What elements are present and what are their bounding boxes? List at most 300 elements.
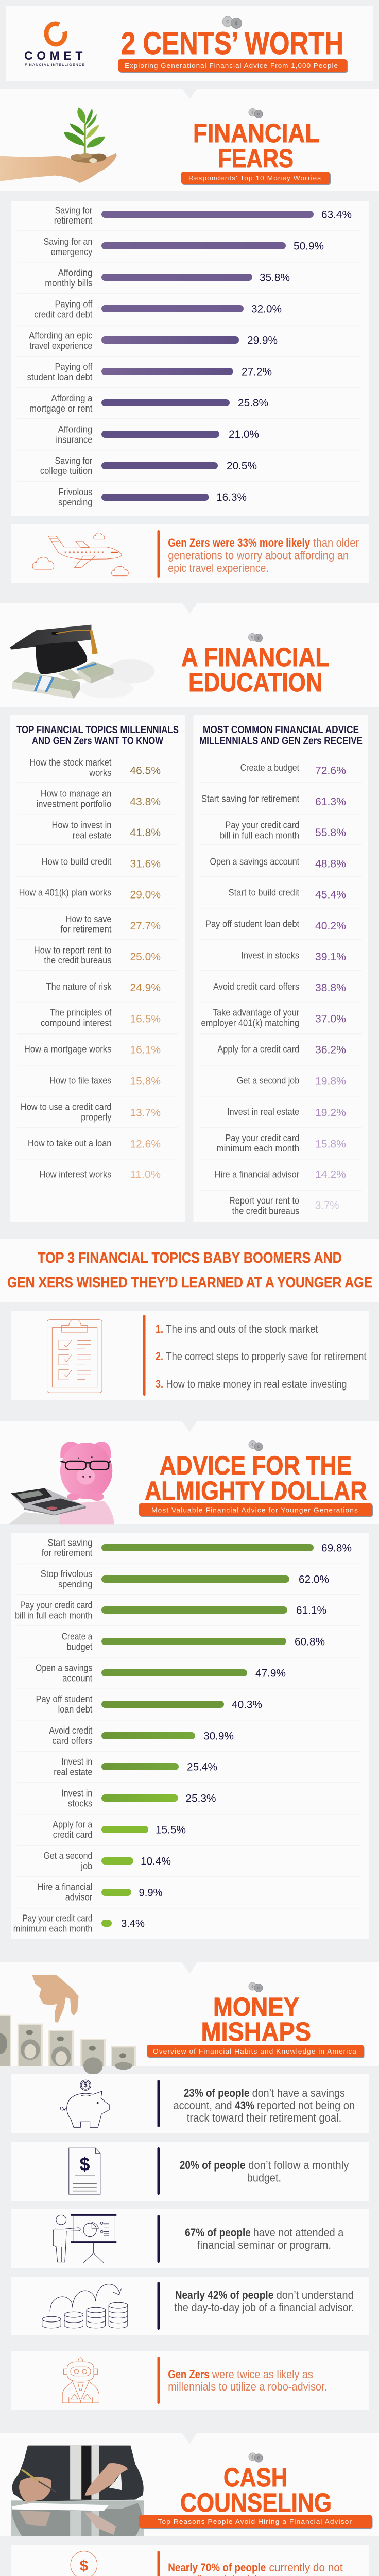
row: Saving for an emergency: Saving for an (43, 236, 92, 247)
panel: Gen Z robo-advisor callout (11, 2351, 369, 2410)
row: apply for a credit card: 36.2% (315, 1044, 346, 1056)
subtitle pill: Exploring Generational Financial Advice From 1,000 People (125, 62, 338, 70)
panel heading (199, 724, 363, 747)
row: second job: 19.8% (315, 1076, 346, 1087)
row: Paying off student loan debt: Paying off (55, 362, 93, 372)
heading (181, 642, 330, 697)
row: Affording a mortgage or rent: 25.8% (238, 397, 268, 409)
icon: coins: ¢ (251, 110, 254, 115)
text block: 23% of people (184, 2087, 249, 2099)
row: Saving for college tuition: Saving for (55, 455, 92, 466)
panel: Gen Z travel callout (11, 524, 369, 583)
row: investment portfolio: How to manage an (41, 788, 111, 799)
text block: 20% of people (180, 2159, 245, 2172)
icon: coins: ¢ (251, 2454, 254, 2460)
section header: Money Mishaps (0, 1962, 379, 2075)
row: Frivolous spending: Frivolous (59, 487, 92, 497)
row: hire advisor: Hire a financial advisor (215, 1170, 299, 1180)
row: savings account: Open a savings account (210, 856, 299, 867)
logo: Comet Financial Intelligence: FINANCIAL INTELLIGENCE (25, 63, 85, 67)
row: pay credit card in full: bill in full each month (15, 1611, 92, 1621)
row: take out a loan (28, 1138, 161, 1150)
row: open a savings account (36, 1663, 286, 1684)
divider bar (158, 2080, 160, 2127)
row: get a second job (43, 1851, 171, 1871)
divider bar (158, 2215, 160, 2263)
icon: advisor with dollar head: $ (80, 2557, 89, 2574)
icon: coins (249, 1440, 263, 1451)
row: 401(k) matching: employer 401(k) matching (201, 1018, 299, 1028)
row: start saving: Start saving (47, 1537, 92, 1548)
row: pay credit card in full: 55.8% (315, 827, 346, 839)
row: nature of risk: 24.9% (130, 982, 161, 994)
row: pay off student loan debt: 40.3% (232, 1699, 262, 1710)
text block (174, 2087, 355, 2124)
divider bar (158, 2147, 160, 2195)
icon: coins: ¢ (257, 1986, 260, 1991)
heading: EDUCATION (188, 668, 322, 697)
row: invest in stocks (241, 950, 346, 963)
text block: Gen Zers (168, 2368, 209, 2381)
row: real estate (51, 820, 161, 841)
row: report rent: 3.7% (315, 1199, 339, 1212)
row: Paying off student loan debt: student loan debt (27, 372, 92, 382)
icon: coins (222, 16, 242, 29)
list item 1: 1. (156, 1323, 163, 1335)
row: savings account (210, 856, 346, 870)
text block: Nearly 70% of people (168, 2561, 266, 2574)
row: invest in real estate: real estate (54, 1767, 92, 1777)
row: build credit: 31.6% (130, 858, 161, 870)
divider bar (158, 2282, 160, 2330)
row: Saving for college tuition (40, 455, 257, 476)
row: create a budget: budget (67, 1641, 92, 1652)
row: start saving: for retirement (42, 1548, 92, 1558)
text block (168, 2561, 343, 2576)
row: Paying off credit card debt: credit card debt (34, 309, 92, 319)
text block: budget. (247, 2171, 281, 2184)
banner: top 3 topics heading: TOP 3 FINANCIAL TOPICS BABY BOOMERS AND (38, 1250, 342, 1266)
row: hire advisor: 14.2% (315, 1168, 346, 1181)
text block: were twice as likely as (212, 2368, 313, 2381)
row: create a budget: Create a (62, 1631, 93, 1641)
row: report rent (229, 1195, 339, 1216)
row: pay minimum (217, 1133, 346, 1154)
text block: reported not being on (257, 2099, 355, 2112)
text block (168, 536, 359, 574)
row: investment portfolio: 43.8% (130, 796, 161, 808)
text block (180, 2159, 349, 2184)
section header: Advice for the Almighty Dollar (0, 1421, 379, 1524)
row: use a credit card (21, 1101, 161, 1122)
heading: FINANCIAL (193, 118, 319, 148)
panel: header (6, 6, 373, 81)
row: avoid credit card offers: 30.9% (203, 1730, 234, 1742)
row: start saving (201, 793, 346, 808)
icon: coins (248, 634, 263, 642)
row: stop frivolous spending: 62.0% (299, 1573, 329, 1586)
row: invest in stocks: Invest in (61, 1788, 92, 1798)
row: savings account: 48.8% (315, 858, 346, 870)
list item 1: The ins and outs of the stock market (166, 1323, 318, 1335)
divider bar (158, 2357, 160, 2404)
row: Frivolous spending: spending (58, 497, 92, 507)
row: pay credit card in full (220, 820, 346, 841)
row: stock market: works (89, 768, 111, 778)
heading: MONEY (213, 1992, 299, 2022)
row: pay credit card in full: bill in full each month (220, 831, 299, 841)
row: pay credit card in full: 61.1% (296, 1604, 326, 1617)
icon: coins: ¢ (257, 636, 260, 641)
row: start saving: 61.3% (315, 796, 346, 808)
row: take out a loan: How to take out a loan (28, 1138, 111, 1148)
logo: Comet Financial Intelligence (24, 22, 87, 67)
row: real estate: 19.2% (315, 1107, 346, 1119)
section header: A Financial Education (0, 603, 379, 707)
row: mortgage (24, 1044, 161, 1056)
image: fingers walking down dollar bills (0, 1975, 136, 2075)
heading: COUNSELING (180, 2488, 332, 2517)
icon: coins: ¢ (251, 1442, 254, 1447)
row: use a credit card: properly (81, 1112, 111, 1122)
icon: budget document: $ (79, 2154, 90, 2175)
row: start saving: 69.8% (321, 1543, 352, 1554)
panel: top 3 list (11, 1311, 369, 1400)
text block: account, and (174, 2099, 232, 2112)
row: build credit (42, 856, 161, 870)
icon: budget document (69, 2148, 100, 2194)
list item 3: How to make money in real estate investing (166, 1378, 347, 1391)
icon: coins: ¢ (226, 18, 229, 25)
icon: clipboard checklist (47, 1319, 102, 1393)
row: nature of risk: The nature of risk (46, 981, 112, 992)
row: get a second job: Get a second (43, 1851, 92, 1861)
divider bar (158, 2551, 160, 2576)
row: 401(k) matching (201, 1008, 346, 1028)
panel: budget stat (11, 2142, 369, 2201)
row: invest in real estate (54, 1757, 217, 1777)
row: pay credit card in full (15, 1600, 326, 1621)
row: 401(k): How a 401(k) plan works (19, 887, 111, 897)
text block: Gen Zers were 33% more likely (168, 536, 311, 549)
row: create a budget: Create a budget (240, 762, 299, 773)
row: Affording an epic travel experience: Affording an epic (29, 331, 92, 341)
row: pay minimum: 15.8% (315, 1139, 346, 1150)
panel heading: AND GEN Zers WANT TO KNOW (32, 736, 163, 747)
row: take out a loan: 12.6% (130, 1139, 161, 1150)
panel: financial advisor stat (11, 2545, 369, 2576)
panel: topics millennials and Gen Zers want to know (10, 715, 185, 1222)
text block: don’t have a savings (252, 2087, 345, 2099)
text block (185, 2226, 344, 2251)
subtitle pill (139, 2515, 373, 2529)
row: build credit: 45.4% (315, 889, 346, 901)
section header: Financial Fears (0, 89, 379, 191)
row: pay off student loan debt: Pay off student (36, 1694, 92, 1704)
row: report rent: 25.0% (130, 951, 161, 963)
row: investment portfolio (36, 788, 161, 809)
row: avoid credit card offers: 38.8% (315, 982, 346, 994)
row: invest in stocks: 39.1% (315, 951, 346, 963)
row: create a budget: 60.8% (295, 1636, 325, 1648)
row: use a credit card: 13.7% (130, 1107, 161, 1119)
row: hire a financial advisor: Hire a financial (38, 1882, 92, 1892)
row: Affording insurance: Affording (58, 425, 92, 435)
row: open a savings account: account (62, 1673, 92, 1684)
row: apply for a credit card: Apply for a (53, 1820, 93, 1830)
row: Affording monthly bills (45, 268, 290, 289)
text block: don’t understand (277, 2289, 354, 2301)
panel heading: MOST COMMON FINANCIAL ADVICE (203, 724, 359, 736)
icon: growing coin stacks (42, 2284, 128, 2328)
row: stop frivolous spending: spending (58, 1579, 92, 1589)
row: stock market: How the stock market (29, 757, 111, 768)
row: Frivolous spending (58, 487, 247, 507)
row: report rent: How to report rent to (34, 945, 111, 955)
row: Paying off student loan debt: 27.2% (242, 366, 272, 378)
panel: bar chart, money worries (11, 201, 369, 516)
row: Affording a mortgage or rent: Affording a (51, 393, 93, 403)
row: invest in stocks: 25.3% (185, 1793, 216, 1804)
row: Affording an epic travel experience: travel experience (29, 341, 92, 351)
subtitle pill: Overview of Financial Habits and Knowledge in America (153, 2047, 357, 2055)
row: student loans: Pay off student loan debt (205, 919, 299, 929)
text block: millennials to utilize a robo-advisor. (168, 2380, 327, 2393)
text block: epic travel experience. (168, 562, 269, 574)
row: avoid credit card offers (49, 1725, 234, 1746)
row: mortgage: How a mortgage works (24, 1044, 111, 1054)
row: pay minimum (13, 1913, 145, 1934)
row: get a second job: job (80, 1861, 92, 1871)
row: save for retirement (60, 914, 161, 935)
row: create a budget (62, 1631, 325, 1652)
row: investment portfolio: investment portfolio (36, 799, 111, 809)
row: build credit (229, 887, 346, 901)
subtitle pill (139, 1503, 373, 1517)
row: report rent: the credit bureaus (232, 1206, 299, 1216)
row: hire a financial advisor: 9.9% (139, 1887, 163, 1899)
row: Paying off student loan debt (27, 362, 272, 382)
heading: ADVICE FOR THE (160, 1451, 352, 1480)
panel: savings stat (11, 2074, 369, 2133)
row: file taxes: 15.8% (130, 1076, 161, 1087)
row: Affording monthly bills: Affording (58, 268, 92, 278)
row: Saving for retirement: Saving for (55, 205, 92, 215)
subtitle pill (181, 172, 331, 185)
row: invest in stocks: stocks (68, 1798, 92, 1808)
subtitle pill (118, 59, 348, 73)
row: save for retirement: for retirement (60, 924, 111, 935)
row: Saving for an emergency: emergency (51, 247, 92, 257)
row: interest (39, 1168, 161, 1181)
row: nature of risk (46, 981, 161, 994)
row: report rent: the credit bureaus (44, 955, 111, 965)
row: avoid credit card offers: card offers (52, 1736, 92, 1746)
text block: currently do not (269, 2561, 343, 2574)
panel heading (16, 724, 179, 747)
row: interest: How interest works (39, 1170, 111, 1180)
row: compound interest (41, 1008, 161, 1028)
row: invest in real estate: 25.4% (187, 1761, 217, 1773)
text block (174, 2289, 354, 2314)
row: Affording insurance: insurance (56, 435, 92, 445)
row: get a second job: 10.4% (141, 1856, 171, 1867)
text block: the day-to-day job of a financial advisor. (174, 2301, 354, 2314)
heading (180, 2463, 332, 2517)
row: start saving: Start saving for retirement (201, 793, 299, 804)
subtitle pill: Top Reasons People Avoid Hiring a Financial Advisor (158, 2518, 352, 2526)
text block: 67% of people (185, 2226, 251, 2239)
text block: generations to worry about affording an (168, 549, 349, 562)
row: Saving for retirement (54, 205, 352, 226)
row: stop frivolous spending (41, 1569, 329, 1589)
icon: coins (249, 1982, 263, 1992)
row: 401(k): 29.0% (130, 889, 161, 901)
row: compound interest: compound interest (41, 1018, 111, 1028)
row: second job: Get a second job (237, 1076, 299, 1086)
logo: Comet Financial Intelligence: COMET (24, 49, 87, 63)
image: graduation cap on money (10, 625, 154, 699)
panel heading: TOP FINANCIAL TOPICS MILLENNIALS (16, 724, 179, 736)
text block: don’t follow a monthly (248, 2159, 349, 2172)
row: create a budget (240, 762, 346, 777)
row: file taxes (49, 1076, 161, 1087)
image: businessman at glass table (11, 2446, 144, 2536)
row: invest in stocks (61, 1788, 216, 1808)
row: create a budget: 72.6% (315, 765, 346, 777)
heading: MISHAPS (201, 2017, 311, 2046)
icon: robot advisor (62, 2358, 99, 2403)
icon: coins: ¢ (257, 112, 260, 117)
text block (168, 2368, 327, 2393)
row: apply for a credit card: 15.5% (156, 1824, 186, 1836)
row: 401(k) (19, 887, 161, 901)
row: pay minimum: Pay your credit card (226, 1133, 299, 1143)
panel: bar chart, most valuable advice (11, 1533, 369, 1939)
icon: coins: ¢ (257, 1444, 260, 1449)
heading: CASH (223, 2463, 287, 2492)
subtitle pill: Respondents' Top 10 Money Worries (188, 174, 321, 182)
icon: airplane and clouds (32, 533, 128, 576)
row: open a savings account: 47.9% (255, 1667, 286, 1680)
row: Paying off credit card debt: Paying off (55, 299, 93, 309)
row: Frivolous spending: 16.3% (216, 492, 247, 503)
list item 2: 2. (156, 1350, 163, 1363)
icon: presenter (53, 2215, 116, 2263)
row: student loans: 40.2% (315, 920, 346, 932)
row: Affording a mortgage or rent: mortgage or rent (29, 403, 92, 414)
row: stock market: 46.5% (130, 765, 161, 777)
row: student loans (205, 919, 346, 932)
row: real estate: How to invest in (51, 820, 111, 831)
row: avoid credit card offers: Avoid credit (49, 1725, 92, 1736)
row: apply for a credit card: Apply for a credit card (217, 1044, 299, 1054)
panel: seminar stat (11, 2209, 369, 2268)
row: stop frivolous spending: Stop frivolous (41, 1569, 92, 1579)
subtitle pill (147, 2045, 365, 2058)
panel: advisor knowledge stat (11, 2277, 369, 2335)
banner: top 3 topics heading (0, 1239, 379, 1302)
row: file taxes: How to file taxes (49, 1076, 111, 1086)
row: Saving for college tuition: 20.5% (227, 460, 257, 472)
icon: coins: ¢ (251, 635, 254, 640)
row: Saving for college tuition: college tuition (40, 466, 92, 476)
text block: track toward their retirement goal. (187, 2111, 341, 2124)
row: pay off student loan debt: loan debt (58, 1704, 92, 1715)
row: 401(k) matching: 37.0% (315, 1013, 346, 1025)
row: apply for a credit card: credit card (53, 1829, 92, 1840)
row: save for retirement: How to save (66, 914, 111, 924)
row: avoid credit card offers: Avoid credit card offers (213, 981, 299, 992)
row: pay off student loan debt (36, 1694, 262, 1715)
row: mortgage: 16.1% (130, 1044, 161, 1056)
row: Affording monthly bills: 35.8% (260, 272, 290, 283)
row: Affording an epic travel experience (29, 331, 278, 351)
text block: have not attended a (253, 2226, 344, 2239)
icon: coins: ¢ (257, 2455, 260, 2461)
row: open a savings account: Open a savings (36, 1663, 92, 1673)
row: build credit: Start to build credit (229, 887, 299, 897)
section header: Cash Counseling (0, 2433, 379, 2536)
row: start saving (42, 1537, 352, 1558)
row: Saving for retirement: retirement (54, 215, 92, 226)
row: Paying off credit card debt: 32.0% (251, 303, 282, 315)
row: real estate: 41.8% (130, 827, 161, 839)
row: Saving for an emergency: 50.9% (294, 240, 324, 252)
icon glyph: dollar coin: $ (83, 2081, 88, 2089)
row: Affording insurance: 21.0% (229, 429, 259, 440)
row: invest in real estate: Invest in (61, 1757, 92, 1767)
heading (145, 1451, 367, 1505)
text block: Nearly 42% of people (175, 2289, 273, 2301)
row: Saving for retirement: 63.4% (321, 209, 352, 221)
list item 3: 3. (156, 1378, 163, 1391)
row: apply for a credit card (53, 1820, 186, 1840)
row: interest: 11.0% (130, 1168, 161, 1181)
image: piggy bank with glasses and calculator (8, 1442, 114, 1524)
row: Affording an epic travel experience: 29.9% (247, 335, 278, 346)
row: second job (237, 1076, 346, 1087)
row: report rent: Report your rent to (229, 1195, 299, 1206)
row: avoid credit card offers (213, 981, 346, 994)
icon: coins (249, 2453, 263, 2462)
row: use a credit card: How to use a credit card (21, 1101, 111, 1112)
row: compound interest: The principles of (50, 1008, 112, 1018)
row: Saving for an emergency (43, 236, 324, 257)
row: hire a financial advisor (38, 1882, 163, 1902)
row: Affording insurance (56, 425, 259, 445)
row: apply for a credit card (217, 1044, 346, 1056)
text block: financial seminar or program. (197, 2239, 331, 2251)
row: 401(k) matching: Take advantage of your (213, 1008, 299, 1018)
row: Affording monthly bills: monthly bills (45, 278, 92, 289)
subtitle pill: Most Valuable Financial Advice for Younger Generations (151, 1506, 358, 1514)
divider bar (143, 1315, 145, 1396)
row: real estate (227, 1107, 346, 1119)
row: real estate: real estate (73, 831, 111, 841)
icon: coins (249, 108, 263, 118)
row: compound interest: 16.5% (130, 1013, 161, 1025)
image: hand holding coins and plant (0, 107, 117, 183)
heading: A FINANCIAL (181, 642, 330, 672)
row: build credit: How to build credit (42, 856, 111, 867)
icon: advisor with dollar head (67, 2551, 102, 2576)
row: real estate: Invest in real estate (227, 1107, 299, 1117)
row: hire a financial advisor: advisor (65, 1892, 92, 1902)
icon: coins: ¢ (251, 1984, 254, 1989)
row: pay minimum: minimum each month (13, 1924, 92, 1934)
icon: piggy bank (60, 2080, 109, 2127)
